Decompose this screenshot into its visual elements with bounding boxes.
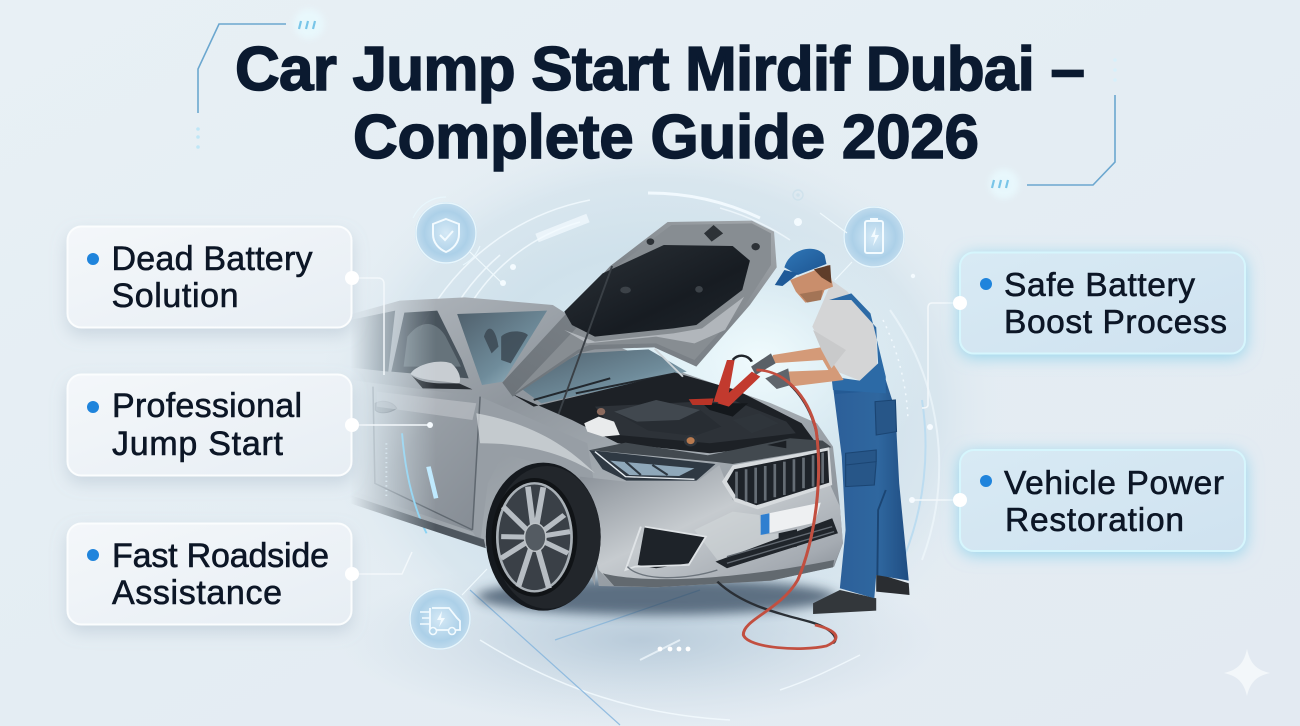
card: Safe Battery Boost Process: Boost Process — [1004, 304, 1227, 341]
connectors left — [352, 278, 433, 574]
card: Vehicle Power Restoration: Vehicle Power — [1004, 465, 1224, 502]
card: Fast Roadside Assistance: Fast Roadside — [112, 537, 329, 575]
card: Vehicle Power Restoration: Restoration — [1005, 502, 1184, 539]
connectors right — [909, 303, 960, 503]
card: Professional Jump Start: Jump Start — [112, 425, 284, 463]
card: Fast Roadside Assistance — [68, 524, 359, 624]
icon: sparkle watermark — [1224, 649, 1270, 696]
rim — [497, 483, 572, 591]
clamps — [714, 360, 760, 407]
title bracket: bottom right — [989, 58, 1117, 199]
body shine — [476, 413, 595, 473]
head — [790, 265, 833, 303]
card: Safe Battery Boost Process — [953, 252, 1245, 354]
boots — [876, 573, 910, 595]
title: Car Jump Start Mirdif Dubai – — [235, 35, 1085, 104]
side windows — [358, 310, 396, 372]
icon: shield check — [413, 197, 506, 286]
jumper cable black — [717, 582, 835, 643]
card: Dead Battery Solution: Dead Battery — [112, 240, 312, 278]
sill — [354, 499, 486, 548]
jumper cable red — [743, 370, 836, 649]
title: Complete Guide 2026 — [353, 103, 979, 172]
tyre — [504, 466, 601, 608]
cap — [784, 249, 826, 275]
number plate — [761, 503, 821, 535]
card: Professional Jump Start — [68, 374, 359, 476]
card: Safe Battery Boost Process: Safe Battery — [1004, 267, 1195, 304]
title bracket: top left — [196, 9, 324, 149]
engine cover — [614, 400, 721, 436]
tech ring arcs — [420, 190, 939, 725]
car body — [342, 297, 843, 587]
gloves — [751, 353, 776, 375]
wheel arch — [486, 463, 601, 611]
door light streaks — [402, 433, 427, 533]
icon: service van — [409, 569, 487, 650]
headlight — [589, 450, 715, 481]
hood strut — [559, 266, 612, 414]
open hood — [502, 221, 777, 397]
card: Professional Jump Start: Professional — [112, 387, 302, 425]
trousers — [833, 380, 909, 598]
front fascia — [580, 465, 843, 587]
card: Dead Battery Solution — [68, 226, 359, 328]
door panels — [390, 386, 475, 532]
windshield — [457, 311, 547, 385]
fog vent — [638, 527, 706, 568]
washer reservoir — [584, 417, 620, 437]
grille — [722, 447, 832, 509]
lower grille — [715, 518, 838, 568]
wipers — [534, 373, 675, 400]
card: Fast Roadside Assistance: Assistance — [112, 574, 282, 612]
ground shadow — [476, 578, 836, 615]
front hood lip — [590, 438, 831, 464]
title — [235, 35, 1085, 172]
card: Vehicle Power Restoration — [953, 450, 1245, 551]
engine bay — [511, 373, 815, 453]
mechanic — [689, 249, 910, 649]
icon: battery bolt — [820, 206, 905, 280]
overalls bib — [829, 293, 886, 393]
car with open hood — [342, 221, 843, 615]
shirt — [812, 281, 877, 381]
arms — [771, 347, 844, 387]
mirror — [410, 362, 460, 384]
card: Dead Battery Solution: Solution — [112, 277, 238, 315]
